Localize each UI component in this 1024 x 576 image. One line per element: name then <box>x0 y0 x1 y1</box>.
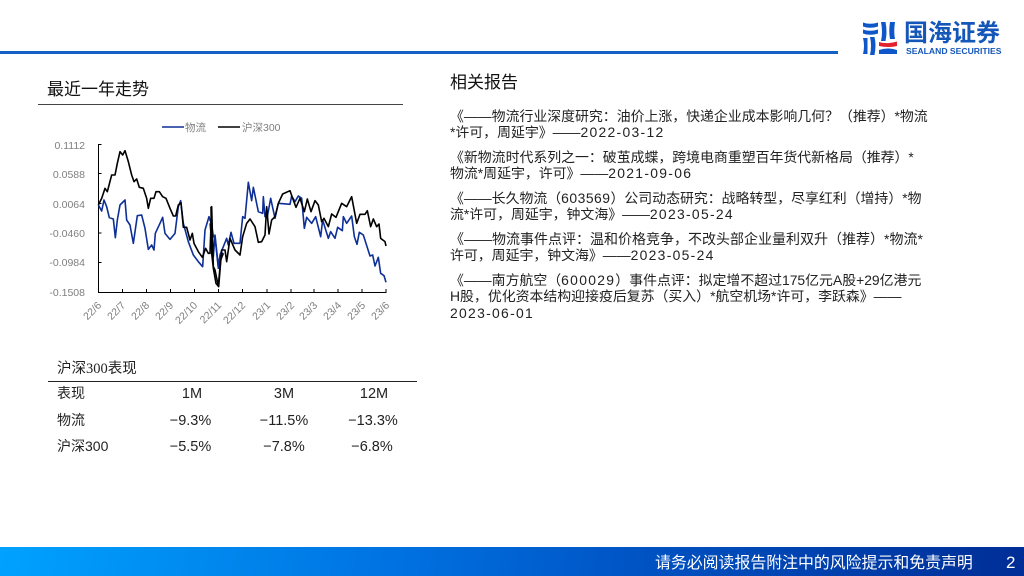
report 2: 《新物流时代系列之一：破茧成蝶，跨境电商重塑百年货代新格局（推荐）* <box>450 149 914 165</box>
table row: header: 1M <box>182 386 202 402</box>
table row: CSI 300: −6.8% <box>351 439 393 455</box>
table row: logistics: −11.5% <box>260 413 308 429</box>
chart legend: 沪深300 <box>242 121 281 134</box>
table row: header: 3M <box>274 386 294 402</box>
x axis labels: 22/7 <box>105 300 128 323</box>
report 3: 流*许可，周延宇，钟文海》——2023-05-24 <box>450 206 734 222</box>
x axis labels: 23/5 <box>345 300 368 323</box>
x axis labels: 22/6 <box>81 300 104 323</box>
x axis labels: 23/1 <box>250 300 273 323</box>
footer bar <box>0 547 1024 576</box>
heading rule <box>38 104 403 105</box>
y axis labels: 0.1112 <box>54 140 85 152</box>
table row: CSI 300: 沪深300 <box>57 438 108 454</box>
x axis labels: 22/9 <box>153 300 176 323</box>
chart legend: 物流 <box>185 121 206 134</box>
logo English name: SEALAND SECURITIES <box>906 46 1002 56</box>
x axis labels: 23/6 <box>369 300 392 323</box>
table row: logistics: −13.3% <box>348 413 398 429</box>
table row: header: 12M <box>360 386 388 402</box>
x axis labels: 23/2 <box>274 300 297 323</box>
header rule <box>0 51 838 54</box>
table row: logistics: −9.3% <box>170 413 211 429</box>
x axis labels: 22/8 <box>129 300 152 323</box>
table row: CSI 300: −5.5% <box>170 439 211 455</box>
table row: logistics <box>57 412 398 429</box>
report 4: 《——物流事件点评：温和价格竞争，不改头部企业量利双升（推荐）*物流* <box>450 231 923 247</box>
report 5 <box>450 272 921 321</box>
logo Chinese name: 国海证券 <box>904 20 1000 47</box>
y axis labels: 0.0064 <box>53 199 85 211</box>
x axis labels <box>81 300 392 327</box>
line chart: logistics vs CSI 300 <box>49 121 392 327</box>
report 3: 《——长久物流（603569）公司动态研究：战略转型，尽享红利（增持）*物 <box>450 190 922 206</box>
heading: recent trend: 最近一年走势 <box>47 80 149 99</box>
logo icon <box>863 22 897 55</box>
x axis labels: 22/12 <box>221 300 248 327</box>
y axis labels: -0.0460 <box>49 228 85 240</box>
y axis labels: 0.0588 <box>53 169 85 181</box>
x axis labels: 23/4 <box>321 300 344 323</box>
series: logistics (blue) <box>98 182 386 282</box>
x axis labels: 23/3 <box>297 300 320 323</box>
report 1 <box>450 108 928 140</box>
table row: logistics: 物流 <box>57 412 85 428</box>
table title: 沪深300表现 <box>57 361 137 377</box>
page number: 2 <box>1006 553 1015 572</box>
table row: header: 表现 <box>57 385 85 401</box>
footer disclaimer: 请务必阅读报告附注中的风险提示和免责声明 <box>655 555 973 572</box>
report 5: 《——南方航空（600029）事件点评：拟定增不超过175亿元A股+29亿港元 <box>450 272 921 288</box>
table row: CSI 300: −7.8% <box>263 439 305 455</box>
report 2: 物流*周延宇，许可》——2021-09-06 <box>450 165 692 181</box>
logo: Sealand Securities <box>863 20 1002 56</box>
report 5: H股，优化资本结构迎接疫后复苏（买入）*航空机场*许可，李跃森》—— <box>450 288 901 304</box>
report 4: 许可，周延宇，钟文海》——2023-05-24 <box>450 247 715 263</box>
report 3 <box>450 190 922 222</box>
report 1: 《——物流行业深度研究：油价上涨，快递企业成本影响几何？（推荐）*物流 <box>450 108 928 124</box>
y axis labels: -0.1508 <box>49 287 85 299</box>
table row: header <box>57 385 388 402</box>
y axis labels <box>49 140 85 299</box>
report 4 <box>450 231 923 263</box>
chart legend <box>162 121 281 134</box>
y axis labels: -0.0984 <box>49 257 85 269</box>
report 2 <box>450 149 914 181</box>
table row: CSI 300 <box>57 438 393 455</box>
x axis labels: 22/11 <box>198 300 224 326</box>
report 5: 2023-06-01 <box>450 305 534 321</box>
axes <box>98 144 386 292</box>
heading: related reports: 相关报告 <box>450 73 518 92</box>
series: CSI 300 (black) <box>98 151 386 287</box>
table rule <box>48 381 417 382</box>
x axis labels: 22/10 <box>173 300 200 327</box>
report list <box>450 108 928 321</box>
report 1: *许可，周延宇》——2022-03-12 <box>450 124 664 140</box>
